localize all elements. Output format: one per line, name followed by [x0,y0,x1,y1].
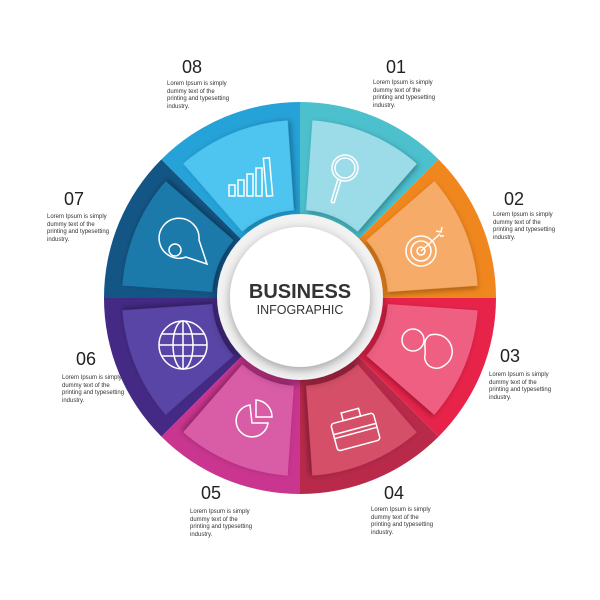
icon: pie chart [236,400,272,437]
label 06 [62,349,124,404]
segment 02 [300,159,537,396]
text: Lorem Ipsum is simply dummy text of the printing and typesetting industry. [371,507,433,536]
segment 01 [300,102,439,298]
label 02 [493,189,555,240]
segment 04 [202,298,439,535]
icon: bar chart [229,158,273,196]
icon: briefcase [329,405,380,451]
text: 05 [201,483,221,503]
text: 08 [182,57,202,77]
label 01 [373,57,435,108]
text: Lorem Ipsum is simply dummy text of the printing and typesetting industry. [167,81,229,110]
label 03 [489,346,551,400]
icon: magnifier [331,155,358,203]
text: 02 [504,189,524,209]
text: Lorem Ipsum is simply dummy text of the printing and typesetting industry. [373,80,435,108]
text: 06 [76,349,96,369]
segment 07 [104,159,300,298]
label 05 [190,483,252,538]
segment 03 [300,298,496,437]
label 08 [167,57,229,110]
label 07 [47,189,109,242]
segment 05 [161,298,300,494]
text: 04 [384,483,404,503]
icon: circles [402,329,452,368]
segment 06 [63,200,300,437]
text: 01 [386,57,406,77]
icon: target [406,227,444,266]
label 04 [371,483,433,536]
text: Lorem Ipsum is simply dummy text of the printing and typesetting industry. [62,375,124,404]
segment 08 [161,61,398,298]
text: Lorem Ipsum is simply dummy text of the printing and typesetting industry. [493,212,555,240]
center circle [217,214,383,380]
center circle: BUSINESS [249,281,351,303]
center circle: INFOGRAPHIC [257,303,343,317]
text: 03 [500,346,520,366]
text: Lorem Ipsum is simply dummy text of the printing and typesetting industry. [489,372,551,400]
text: Lorem Ipsum is simply dummy text of the printing and typesetting industry. [47,214,109,242]
text: 07 [64,189,84,209]
icon: globe [159,321,207,369]
text: Lorem Ipsum is simply dummy text of the printing and typesetting industry. [190,509,252,538]
icon: location pin [159,218,207,264]
